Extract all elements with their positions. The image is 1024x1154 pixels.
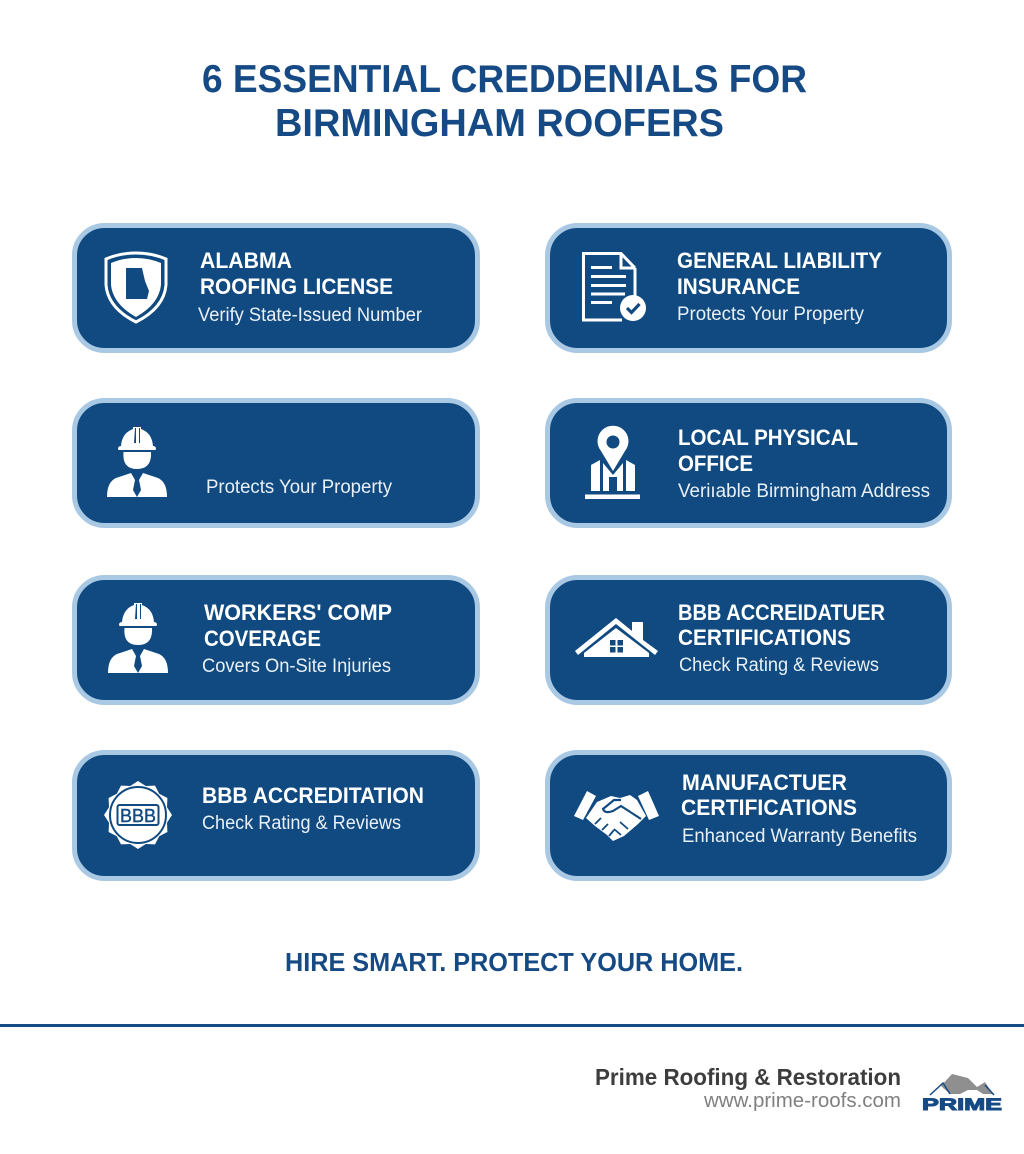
- heading: CERTIFICATIONS: [678, 625, 851, 650]
- heading: CERTIFICATIONS: [681, 795, 857, 820]
- panel: untitled worker card: [74, 400, 478, 526]
- heading: [678, 425, 858, 476]
- subtext: Enhanced Warranty Benefits: [682, 826, 917, 847]
- subtext: Verify State-Issued Number: [198, 305, 423, 326]
- heading: OFFICE: [678, 451, 753, 476]
- subtext: Protects Your Property: [206, 477, 392, 498]
- heading: COVERAGE: [204, 626, 321, 651]
- heading: WORKERS' COMP: [204, 600, 392, 625]
- heading: BBB ACCREIDATUER: [678, 600, 885, 625]
- panel: Alabama roofing license: [74, 226, 478, 350]
- heading: LOCAL PHYSICAL: [678, 425, 858, 450]
- heading: ALABMA: [200, 248, 292, 273]
- heading: [204, 600, 392, 651]
- subtext: Check Rating & Reviews: [202, 813, 401, 834]
- panel: general liability insurance: [548, 226, 950, 350]
- panel: BBB accreditation: [74, 752, 478, 878]
- icon: Prime logo: [922, 1074, 1002, 1114]
- icon: Prime logo: PRIME: [922, 1095, 1002, 1114]
- footer website: www.prime-roofs.com: [703, 1090, 901, 1112]
- icon: handshake: [574, 791, 659, 841]
- title: 6 ESSENTIAL CREDDENIALS FOR: [202, 58, 807, 101]
- footer company name: Prime Roofing & Restoration: [595, 1064, 901, 1090]
- icon: BBB seal: BBB: [120, 806, 156, 826]
- subtext: Veriıable Birmingham Address: [678, 481, 930, 502]
- subtext: Protects Your Property: [677, 304, 864, 325]
- icon: document with check: [584, 254, 646, 321]
- subtext: Check Rating & Reviews: [679, 655, 879, 676]
- panel: BBB accreidatuer certifications: [548, 578, 950, 702]
- heading: MANUFACTUER: [682, 770, 847, 795]
- icon: location pin over building: [585, 426, 640, 499]
- tagline: HIRE SMART. PROTECT YOUR HOME.: [285, 947, 743, 977]
- heading: GENERAL LIABILITY: [677, 248, 882, 273]
- title: BIRMINGHAM ROOFERS: [275, 102, 724, 145]
- heading: [677, 248, 882, 299]
- panel: manufacturer certifications: [548, 752, 950, 878]
- heading: BBB ACCREDITATION: [202, 783, 424, 808]
- icon: worker with hard hat: [107, 427, 167, 497]
- heading: [200, 248, 393, 299]
- panel: workers' comp coverage: [74, 578, 478, 702]
- panel: local physical office: [548, 400, 950, 526]
- subtext: Covers On-Site Injuries: [202, 656, 391, 677]
- icon: house roof: [575, 618, 658, 657]
- heading: [681, 770, 857, 820]
- title: [202, 58, 807, 145]
- icon: BBB seal: [104, 781, 172, 849]
- icon: worker with hard hat: [108, 603, 168, 673]
- heading: [678, 600, 885, 650]
- heading: INSURANCE: [677, 274, 800, 299]
- heading: ROOFING LICENSE: [200, 274, 393, 299]
- icon: shield with Alabama state: [106, 253, 166, 322]
